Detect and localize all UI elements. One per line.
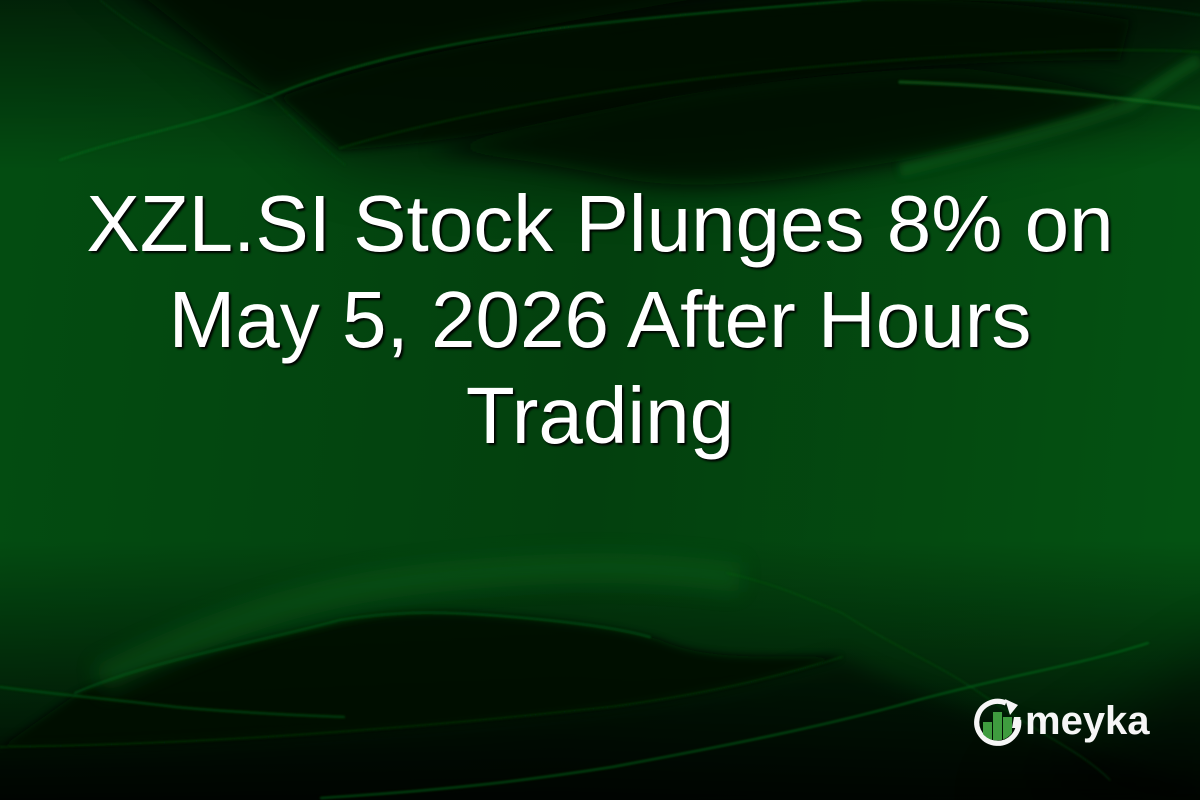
glow bands: [100, 568, 740, 680]
bottom dark masses: [0, 657, 1200, 800]
icon: circular arrow with green bars: [974, 698, 1022, 746]
title: XZL.SI Stock Plunges 8% on May 5, 2026 After Hours Trading: [86, 179, 1114, 460]
top dark masses: [90, 0, 1200, 183]
wordmark: meyka: [1025, 699, 1150, 743]
logo: meyka: [974, 698, 1150, 746]
